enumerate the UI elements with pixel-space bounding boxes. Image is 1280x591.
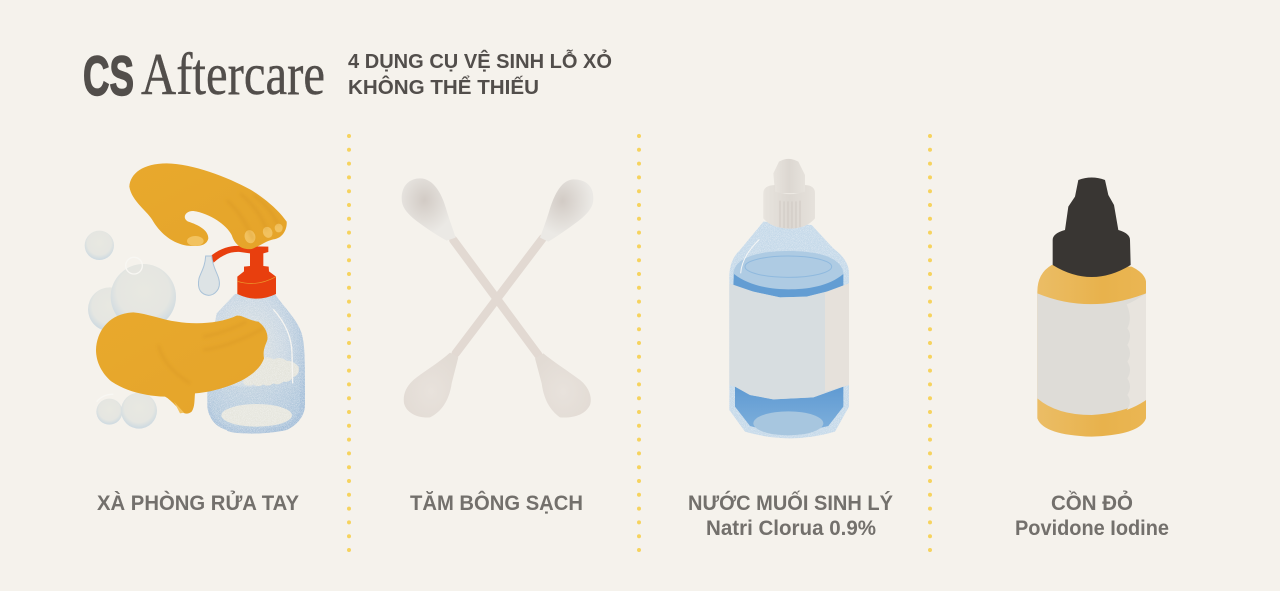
panel: soap illustration [85, 163, 305, 434]
icon: bottle label [729, 283, 849, 399]
label: povidone: Povidone Iodine [1015, 517, 1169, 540]
icon: lower liquid [735, 387, 843, 435]
panel: saline bottle illustration [729, 159, 849, 438]
label: saline [688, 491, 893, 540]
icon: black cap [1053, 177, 1131, 277]
dotted dividers [349, 136, 930, 552]
icon: swab sticks [453, 238, 543, 355]
icon: bottle cap [763, 159, 815, 229]
label: povidone [1015, 491, 1169, 540]
label: soap: XÀ PHÒNG RỬA TAY [97, 491, 299, 515]
icon: upper liquid [733, 239, 843, 297]
panel: povidone bottle illustration [1037, 177, 1146, 437]
icon: gold bottle body [1037, 265, 1146, 437]
icon: soap bubbles [85, 231, 176, 429]
icon: soap drop [198, 256, 219, 295]
label: saline: NƯỚC MUỐI SINH LÝ [688, 491, 893, 515]
icon: red pump [211, 246, 276, 299]
heading [348, 49, 612, 99]
logo: CS Aftercare [83, 41, 325, 107]
panel: cotton swabs illustration [402, 178, 593, 418]
label: povidone: CỒN ĐỎ [1051, 491, 1133, 515]
heading: KHÔNG THỂ THIẾU [348, 75, 539, 99]
logo: CS Aftercare: Aftercare [141, 41, 325, 107]
heading: 4 DỤNG CỤ VỆ SINH LỖ XỎ [348, 49, 612, 73]
icon: soap bottle [207, 294, 305, 434]
icon: top hand [129, 163, 287, 249]
icon: swab heads [402, 178, 593, 418]
icon: bottom hand [96, 312, 268, 414]
label: cotton swabs: TĂM BÔNG SẠCH [410, 491, 583, 515]
label: saline: Natri Clorua 0.9% [706, 517, 876, 540]
logo: CS Aftercare: CS [83, 44, 134, 107]
icon: bottle body [729, 222, 849, 438]
icon: bottle label [1037, 293, 1146, 415]
